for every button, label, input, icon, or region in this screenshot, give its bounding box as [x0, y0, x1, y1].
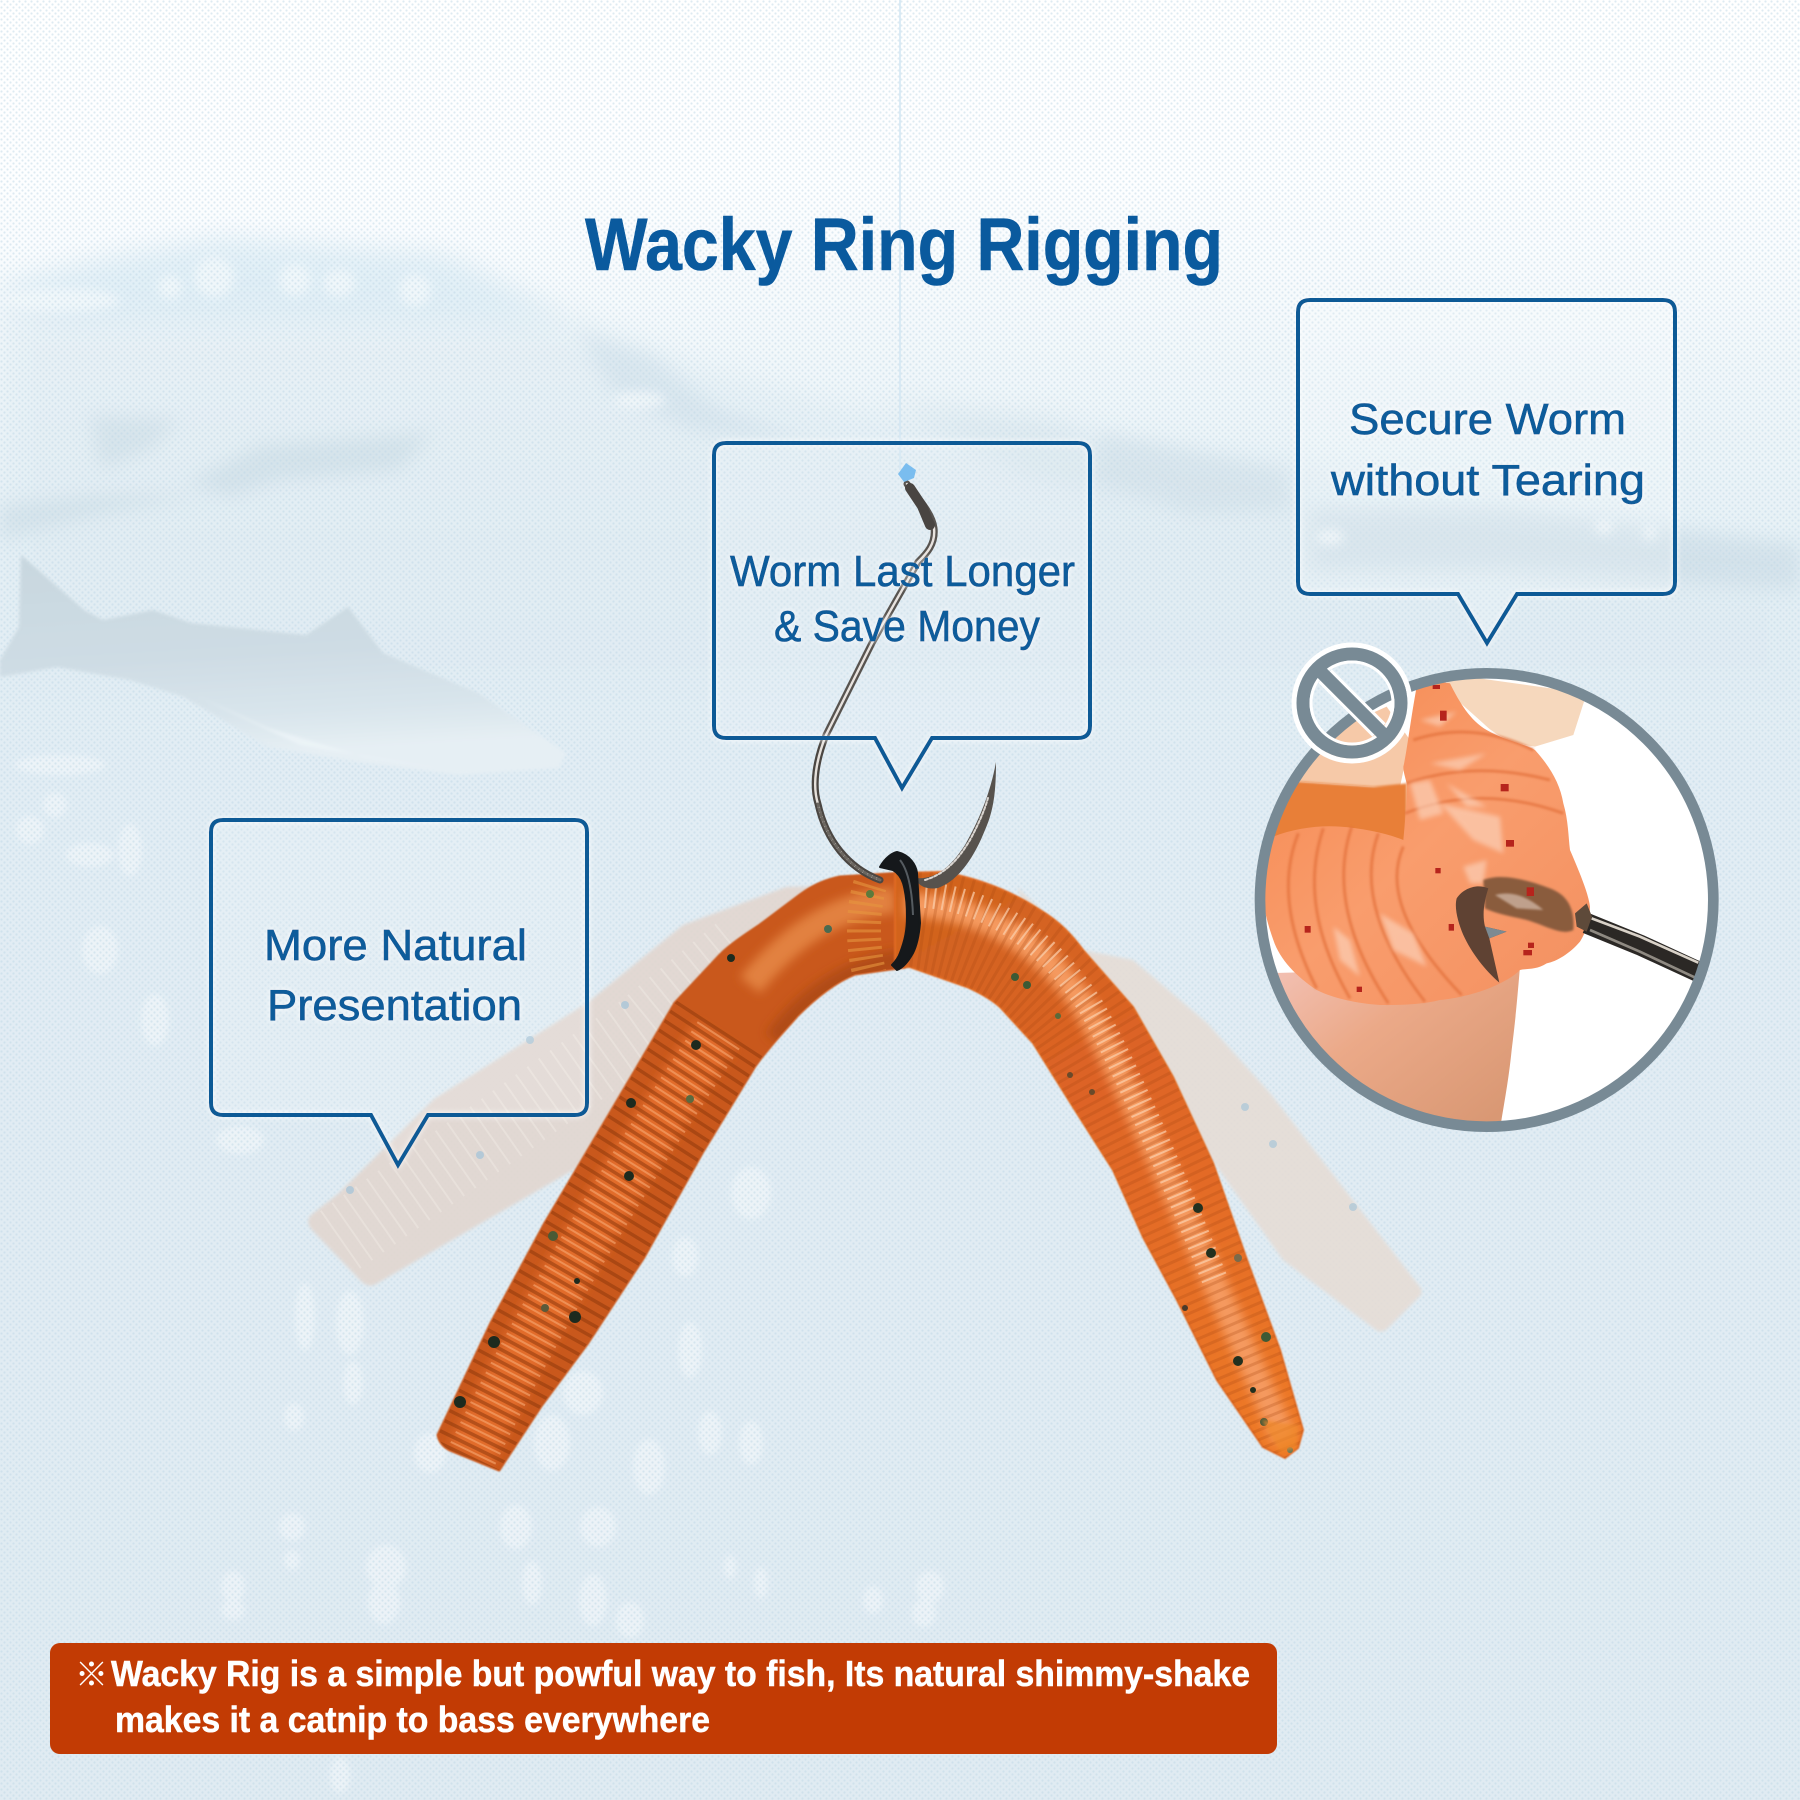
left arm speckles: [454, 890, 874, 1408]
tear in worm: [1483, 877, 1574, 932]
worm ribs: [1288, 732, 1563, 1003]
note text: Wacky Rig is a simple but powful way to fish, Its natural shimmy-shake: [111, 1653, 1250, 1694]
note banner: [50, 1643, 1277, 1754]
callout text: Worm Last Longer: [730, 547, 1075, 596]
red flakes: [1305, 685, 1534, 992]
callout text: [1330, 395, 1645, 505]
fishing hook: [815, 463, 996, 888]
worm: right arm: [895, 872, 1303, 1470]
hook point: [915, 762, 996, 888]
ghost worm right: [1017, 887, 1422, 1332]
callout: worm last longer: [714, 443, 1090, 788]
skin below worm: [1278, 970, 1520, 1122]
icon: prohibition sign: [1294, 645, 1410, 761]
fishing line: [899, 0, 901, 470]
hook point: [1456, 886, 1507, 983]
callout: more natural presentation: [211, 820, 587, 1165]
background fish silhouette: [0, 555, 566, 775]
callout text: [264, 921, 527, 1030]
callout text: More Natural: [264, 921, 527, 970]
callout text: [730, 547, 1075, 651]
ghost worm left: [308, 885, 860, 1286]
note text: makes it a catnip to bass everywhere: [115, 1699, 710, 1740]
finger top: [1447, 678, 1584, 747]
title: Wacky Ring Rigging: [585, 203, 1223, 286]
reference mark: ※: [75, 1656, 108, 1693]
callout text: Presentation: [267, 981, 522, 1030]
skin upper left: [1290, 707, 1410, 787]
hook shank: [1587, 923, 1702, 973]
callout text: Secure Worm: [1349, 395, 1626, 444]
right arm speckles: [1011, 973, 1293, 1453]
callout: secure worm: [1298, 300, 1675, 643]
rubber O-ring: [880, 852, 920, 970]
hook eye knot: [898, 463, 916, 482]
shadow behind worm: [1274, 780, 1407, 840]
worm: left arm: [438, 873, 905, 1470]
note text: [111, 1653, 1250, 1740]
callout text: without Tearing: [1330, 456, 1645, 505]
worm tip highlight: [1262, 1420, 1298, 1452]
callout text: & Save Money: [774, 602, 1040, 651]
torn worm: [1260, 682, 1590, 1005]
circular detail photo: [1260, 673, 1713, 1130]
worm highlights: [1333, 712, 1503, 977]
